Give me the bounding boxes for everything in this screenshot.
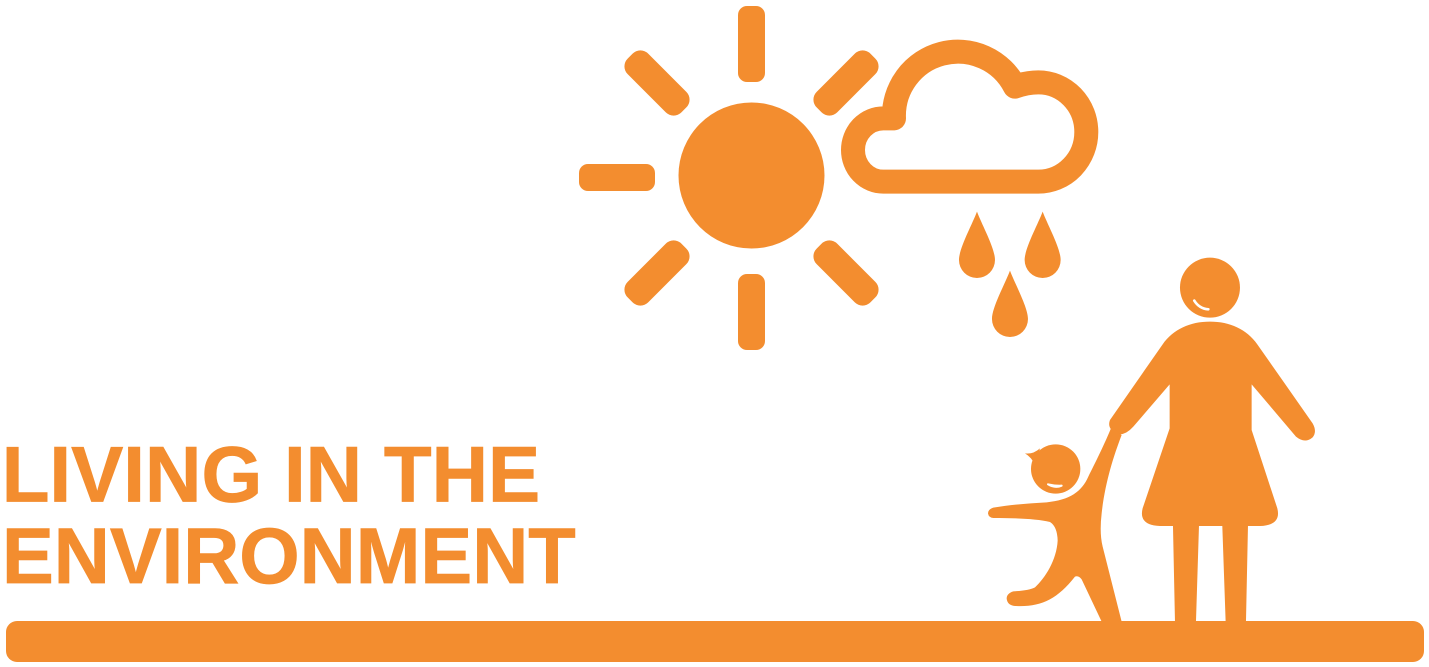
icon: child bbox=[988, 427, 1122, 622]
icon: cloud bbox=[853, 52, 1086, 182]
ground bar bbox=[6, 621, 1424, 662]
title bbox=[2, 429, 576, 600]
icon: sun bbox=[579, 6, 883, 350]
title line 1: LIVING IN THE bbox=[2, 429, 540, 518]
title line 2: ENVIRONMENT bbox=[2, 511, 576, 600]
icon: rain drops bbox=[959, 212, 1061, 337]
icon: woman bbox=[1109, 258, 1315, 622]
